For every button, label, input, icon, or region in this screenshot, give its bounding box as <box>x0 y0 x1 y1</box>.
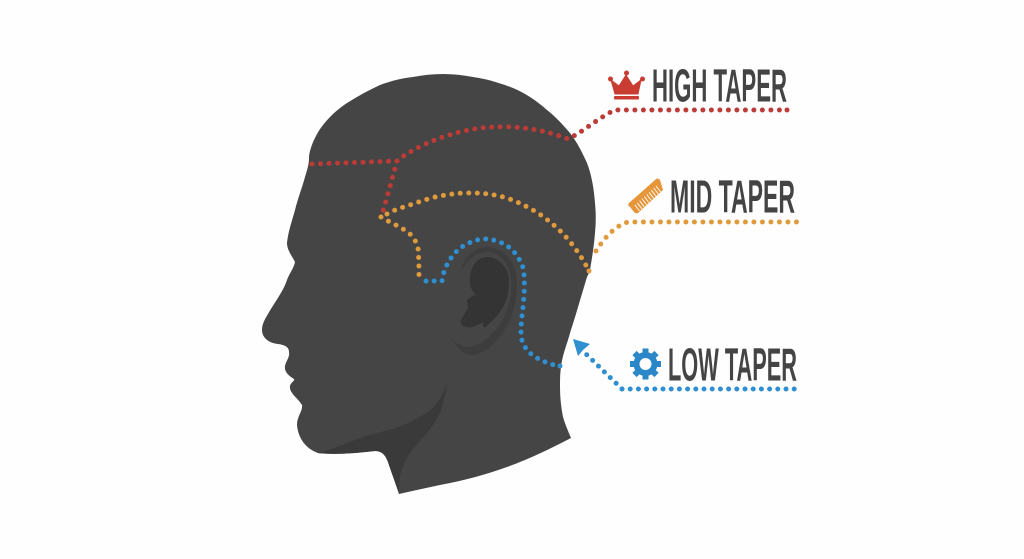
high taper line (red dotted) <box>312 108 790 217</box>
icon: gear <box>630 348 661 380</box>
infographic: taper haircut levels: HIGH TAPER <box>652 60 787 112</box>
low taper line (blue dotted) <box>426 239 797 389</box>
infographic: taper haircut levels: LOW TAPER <box>668 338 797 390</box>
heading: mid taper: MID TAPER <box>670 170 795 222</box>
icon: ear <box>452 247 517 355</box>
arrow: low taper pointer <box>573 339 590 356</box>
icon: comb <box>628 178 663 213</box>
mid taper line (orange dotted) <box>381 193 798 281</box>
jaw shadow <box>317 383 447 493</box>
head silhouette <box>262 74 596 494</box>
icon: crown <box>608 70 645 100</box>
